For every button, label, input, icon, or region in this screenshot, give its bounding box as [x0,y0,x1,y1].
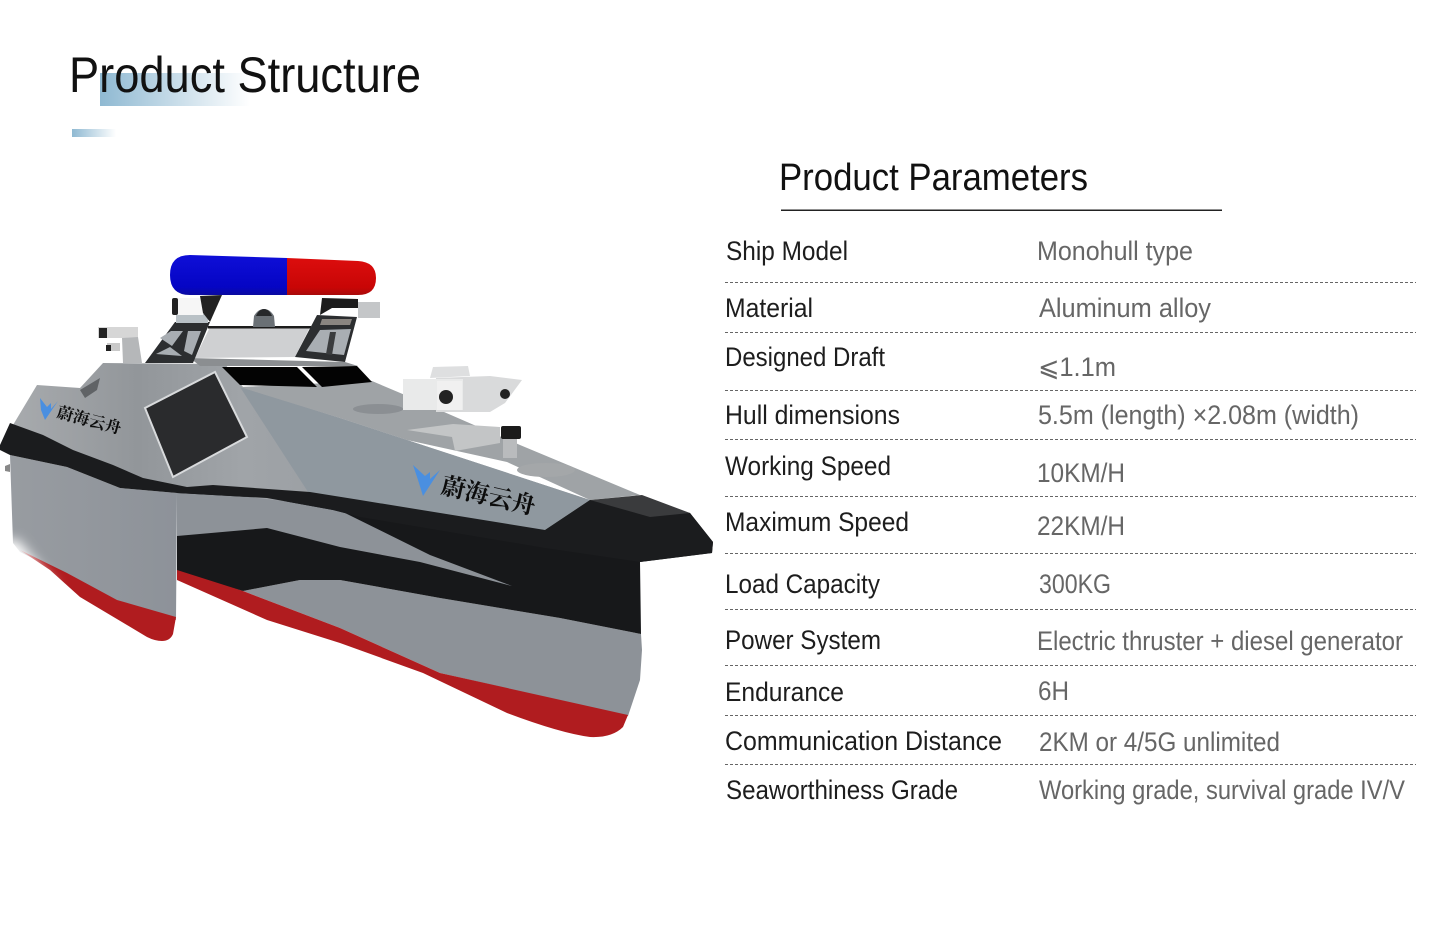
logo: bow: 蔚海云舟 [439,473,538,520]
row: Communication Distance: Communication Distance [725,726,1002,756]
row: Ship Model [726,236,1193,266]
row: Material: Aluminum alloy [1039,293,1211,323]
left frame [145,314,210,363]
row: Designed Draft: ⩽1.1m [1038,352,1116,382]
row: Load Capacity [725,569,1111,599]
row: Maximum Speed: 22KM/H [1037,511,1125,541]
dome sensor [253,309,275,327]
logo: stern: 蔚海云舟 [55,403,124,438]
row: Hull dimensions: 5.5m (length) ×2.08m (width) [1038,400,1359,430]
solar panel [145,372,247,477]
left hull [0,455,177,641]
row: Working Speed: Working Speed [725,451,891,481]
row: Endurance [725,676,1069,707]
row: Endurance: Endurance [725,677,844,707]
row: Maximum Speed [725,507,1125,541]
logo: bow [413,465,538,520]
illustration: unmanned surface vessel [0,255,713,737]
superstructure and deck [10,363,640,530]
row: Seaworthiness Grade: Seaworthiness Grade [726,775,958,805]
row: Designed Draft [725,342,1116,382]
row: Working Speed: 10KM/H [1037,458,1125,488]
right hull [177,480,713,737]
title: Product Structure [69,47,421,137]
right frame [295,315,357,362]
icon: mast camera [98,327,142,363]
row: Designed Draft: Designed Draft [725,342,885,372]
heading: Product Parameters: Product Parameters [779,157,1088,199]
row: Load Capacity: 300KG [1039,569,1111,599]
row: Working Speed [725,451,1125,488]
row: Ship Model: Monohull type [1037,236,1193,266]
row: Endurance: 6H [1038,676,1069,706]
title: Product Structure: Product Structure [69,47,421,103]
electro-optical camera turret [353,366,575,477]
row: Hull dimensions [725,400,1359,430]
row: Power System: Power System [725,625,881,655]
row: Power System: Electric thruster + diesel generator [1037,626,1403,656]
logo: stern [40,398,124,438]
warning light bar [170,255,376,295]
row: Communication Distance: 2KM or 4/5G unlimited [1039,727,1280,757]
row: Material [725,293,1211,323]
black stripe and bow [0,423,713,562]
row: Hull dimensions: Hull dimensions [725,400,900,430]
row: Maximum Speed: Maximum Speed [725,507,909,537]
row: Communication Distance [725,726,1280,757]
row: Load Capacity: Load Capacity [725,569,880,599]
row: Seaworthiness Grade [726,775,1405,805]
row: Material: Material [725,293,813,323]
row: Power System [725,625,1403,656]
parameters table [725,236,1416,805]
row: Ship Model: Ship Model [726,236,848,266]
cockpit windows and frame [145,295,380,387]
